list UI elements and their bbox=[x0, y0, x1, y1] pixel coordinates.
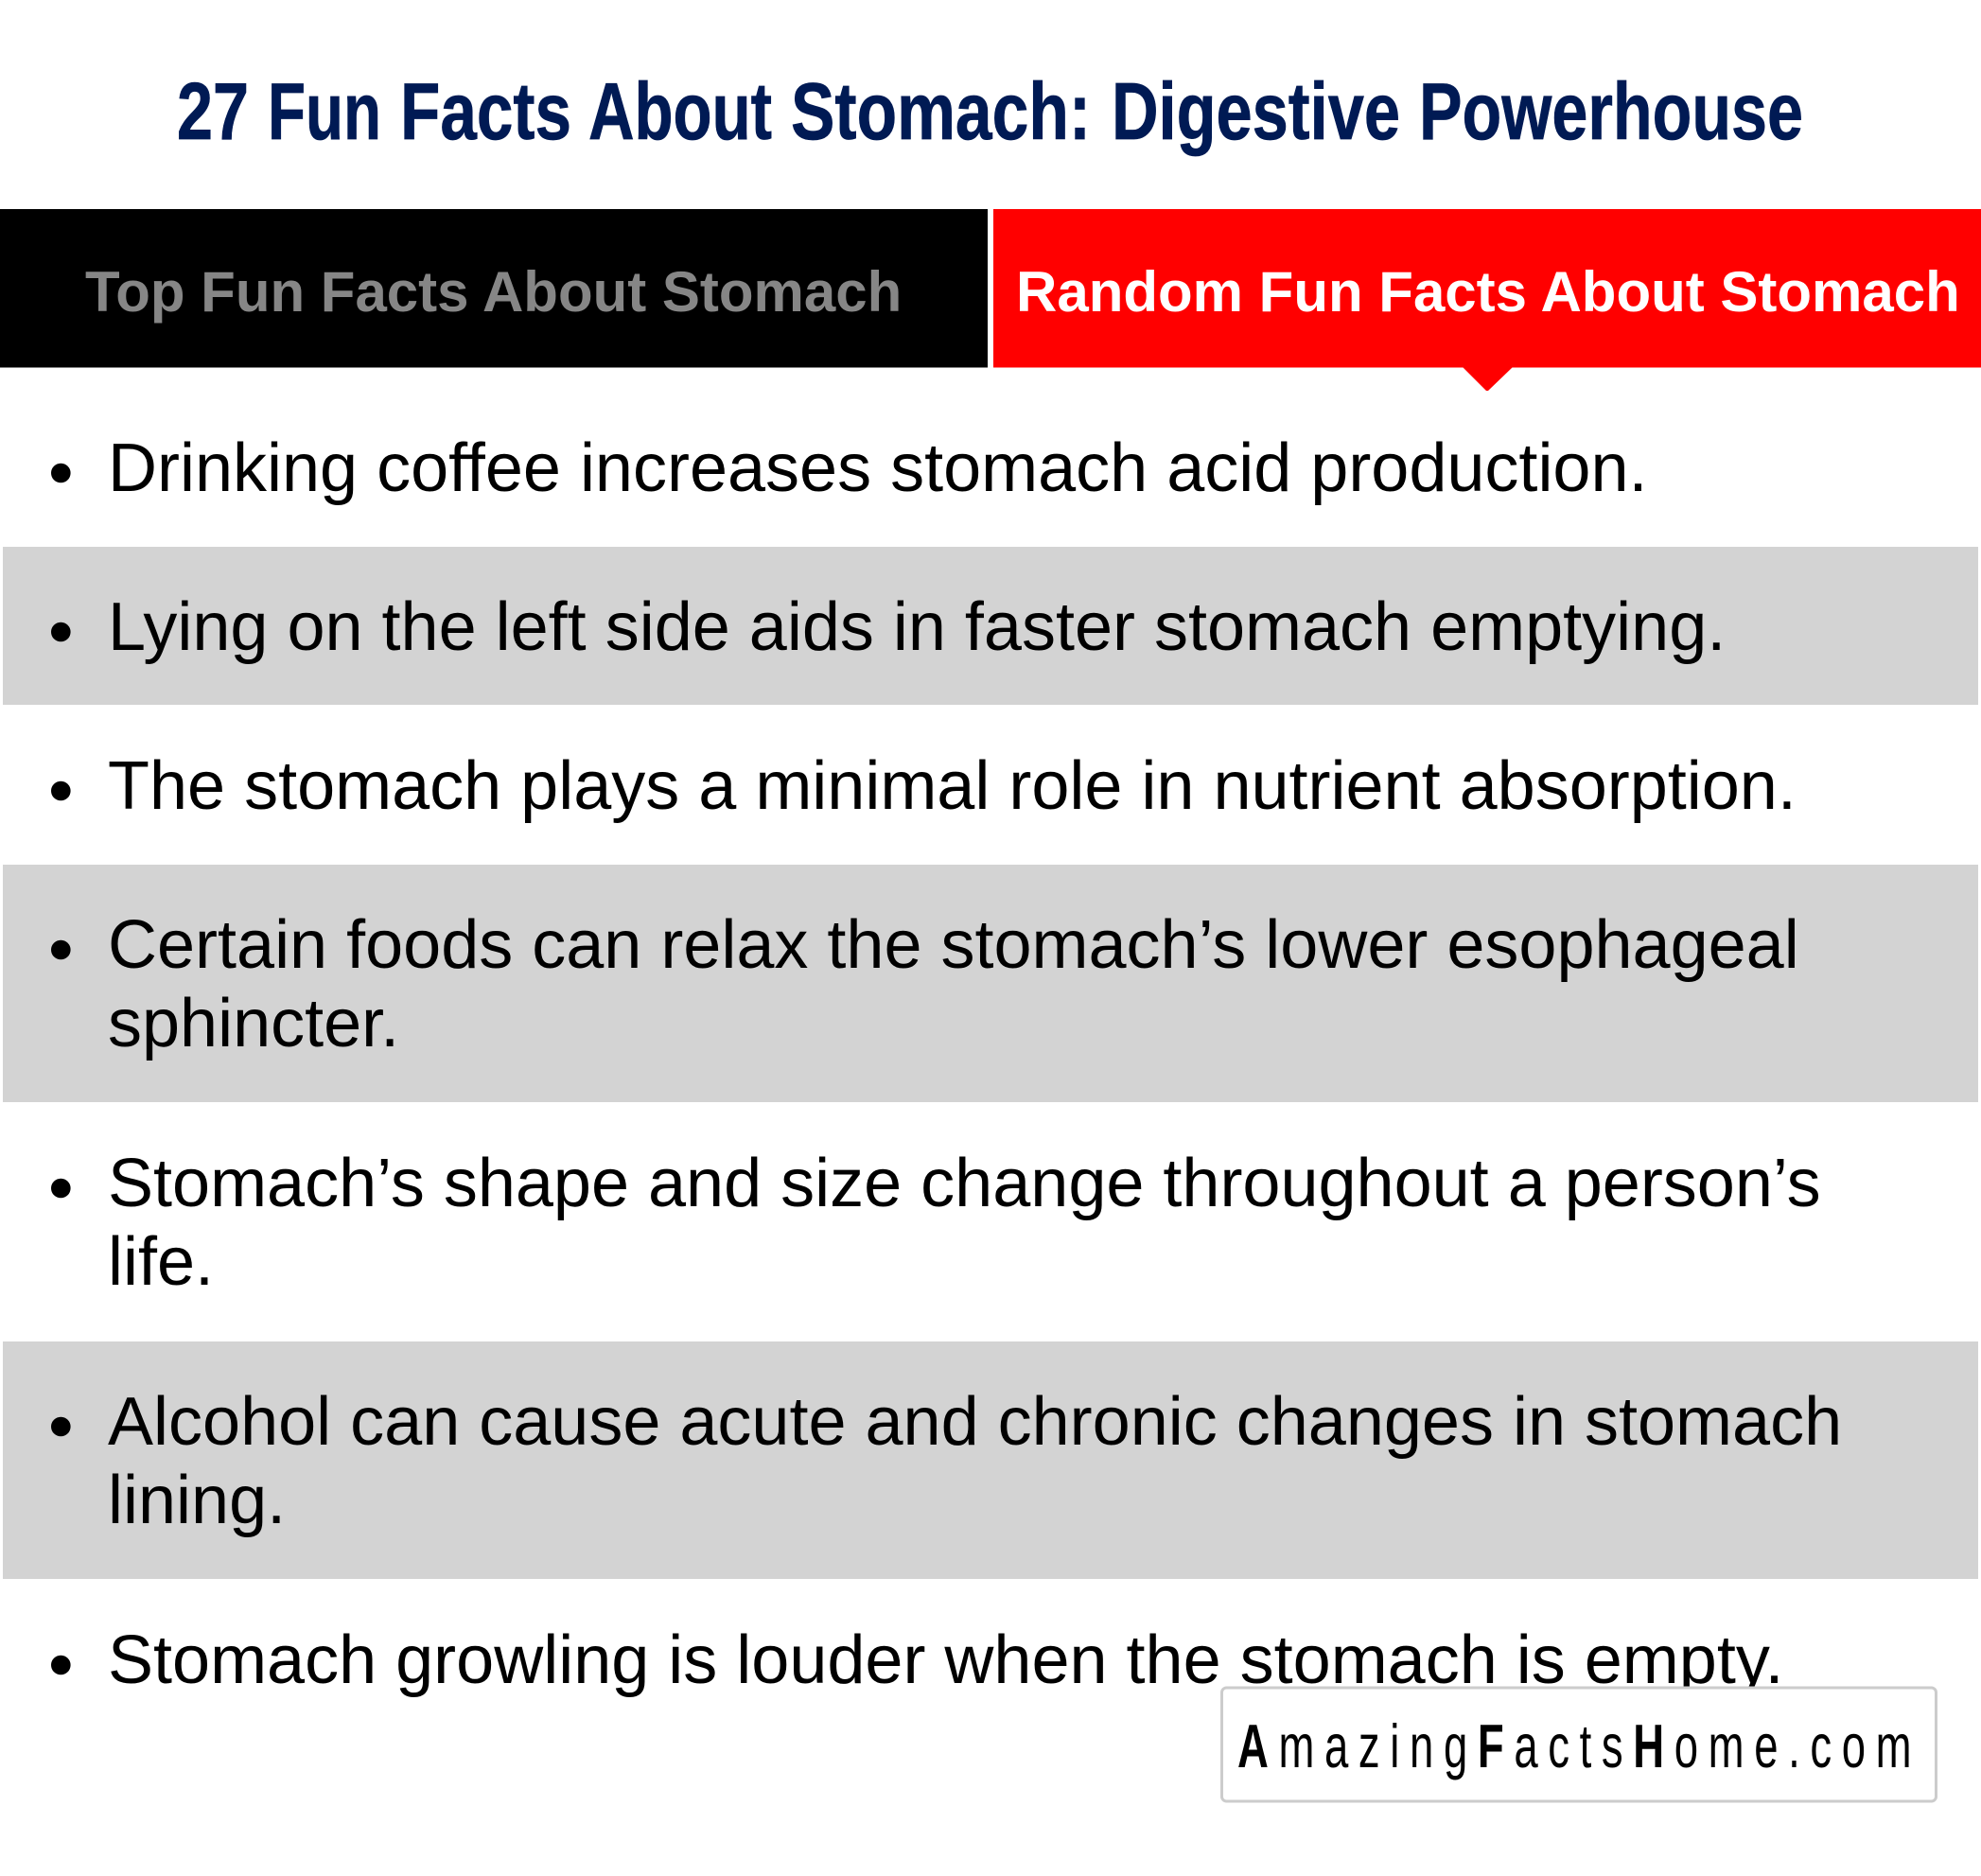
title: About bbox=[588, 67, 772, 157]
fact 5 bbox=[51, 1146, 1821, 1300]
watermark badge: AmazingFactsHome.com bbox=[1237, 1711, 1912, 1780]
fact 3: The stomach plays a minimal role in nutrient absorption. bbox=[108, 748, 1797, 824]
watermark badge bbox=[1222, 1688, 1936, 1801]
title: Stomach: bbox=[791, 67, 1091, 157]
fact 2 row: Lying on the left side aids in faster stomach emptying. bbox=[108, 589, 1726, 665]
fact 5: life. bbox=[108, 1224, 214, 1300]
title: 27 bbox=[177, 67, 249, 157]
fact 6 row: lining. bbox=[108, 1463, 286, 1538]
tab: random fun facts (active): Random Fun Facts About Stomach bbox=[1016, 260, 1960, 324]
fact 1: Drinking coffee increases stomach acid production. bbox=[108, 430, 1648, 506]
title: Facts bbox=[400, 67, 571, 157]
fact 7: Stomach growling is louder when the stomach is empty. bbox=[108, 1622, 1784, 1698]
fact 4 row bbox=[3, 865, 1978, 1102]
fact 5: Stomach’s shape and size change throughout a person’s bbox=[108, 1146, 1821, 1221]
fact 4 row: Certain foods can relax the stomach’s lower esophageal bbox=[108, 907, 1799, 983]
title: Digestive bbox=[1112, 67, 1400, 157]
title: Fun bbox=[268, 67, 381, 157]
title bbox=[177, 67, 1803, 157]
fact 6 row: Alcohol can cause acute and chronic changes in stomach bbox=[108, 1384, 1842, 1460]
title: Powerhouse bbox=[1419, 67, 1803, 157]
fact 6 row bbox=[3, 1341, 1978, 1579]
fact 4 row: sphincter. bbox=[108, 986, 399, 1061]
fact 2 row bbox=[3, 547, 1978, 705]
tab: random fun facts (active) bbox=[993, 209, 1981, 391]
tab: top fun facts: Top Fun Facts About Stomach bbox=[85, 260, 902, 324]
tab: top fun facts bbox=[0, 209, 988, 367]
